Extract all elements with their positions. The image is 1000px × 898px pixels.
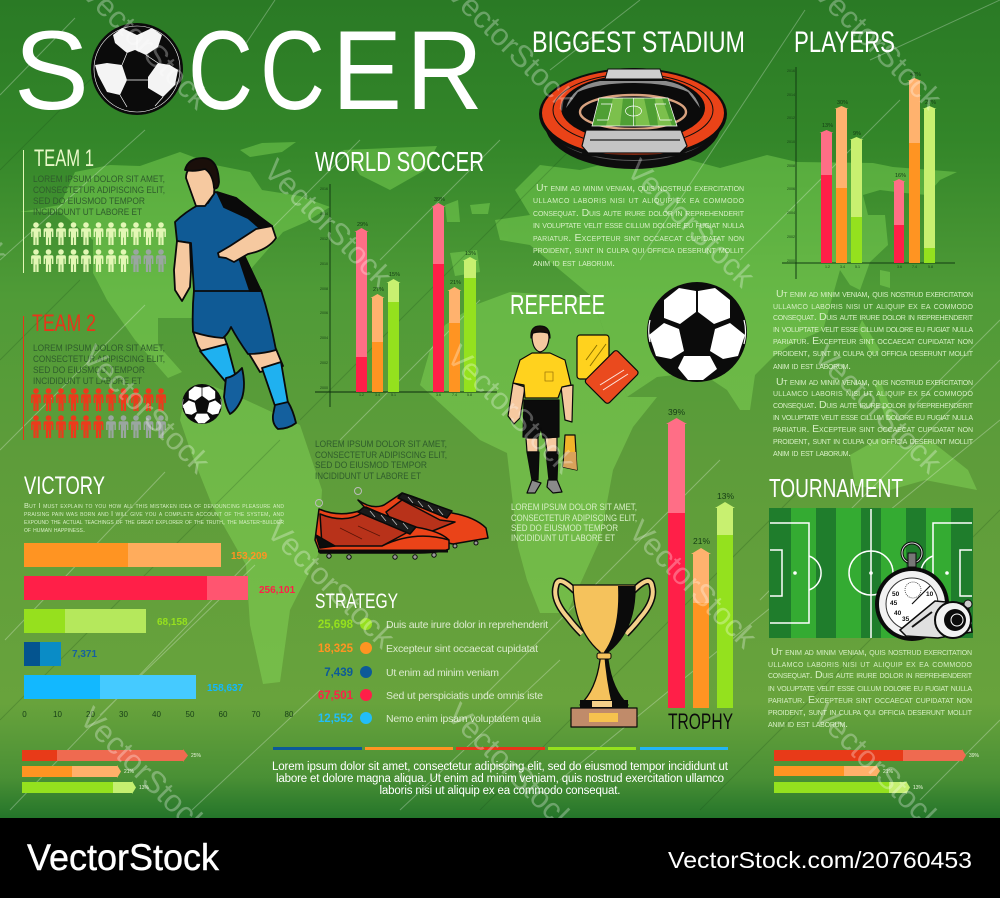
text block: players: proident, sunt in culpa qui officia deserunt mollit xyxy=(773,435,974,447)
text block: players: consequat. Duis aute irure dolor in reprehenderit xyxy=(773,399,974,411)
list: strategy items: Duis aute irure dolor in reprehenderit xyxy=(386,619,548,631)
text block: team 1 xyxy=(33,174,165,218)
text block: stadium: ullamco laboris nisi ut aliquip ex ea commodo xyxy=(533,194,745,206)
text block: players: Ut enim ad minim veniam, quis nostrud exercitation xyxy=(776,288,973,300)
list: strategy items: Nemo enim ipsam voluptatem quia xyxy=(386,713,541,725)
icon: stopwatch xyxy=(875,543,949,641)
text block: players: anim id est laborum. xyxy=(773,360,851,372)
footer logo text: VectorStock xyxy=(27,837,219,878)
chart: world soccer bars: 2002 xyxy=(320,361,328,365)
chart: world soccer bars: 1.2 xyxy=(359,393,364,397)
heading: victory: VICTORY xyxy=(24,472,105,500)
world map xyxy=(20,142,977,684)
title: SOCCER: R xyxy=(406,8,483,133)
text block: referee caption: LOREM IPSUM DOLOR SIT AMET, xyxy=(511,502,637,513)
icon: small soccer ball xyxy=(182,384,222,424)
chart: players bars: 2004 xyxy=(787,211,795,215)
icon: trophy cup xyxy=(555,581,653,727)
icons: team 2 people xyxy=(31,388,166,438)
text block: tournament: proident, sunt in culpa qui officia deserunt mollit xyxy=(768,706,973,718)
chart: world soccer bars: 2012 xyxy=(320,237,328,241)
text block: referee caption: INCIDIDUNT UT LABORE ET xyxy=(511,533,615,544)
chart: players bars xyxy=(782,67,955,279)
list: strategy items: Excepteur sint occaecat cupidatat xyxy=(386,643,538,655)
heading: strategy: STRATEGY xyxy=(315,590,398,613)
chart: victory horizontal bars: 7,371 xyxy=(72,649,97,660)
text block: stadium: consequat. Duis aute irure dolor in reprehenderit xyxy=(533,207,745,219)
text block: tournament: anim id est laborum. xyxy=(768,718,848,730)
text block: stadium: pariatur. Excepteur sint occaecat cupidatat non xyxy=(533,232,744,244)
chart: world soccer bars: 3.4 xyxy=(375,393,380,397)
heading: players: PLAYERS xyxy=(794,26,895,59)
dividers: footer colour strip xyxy=(273,747,728,750)
text block: players: ullamco laboris nisi ut aliquip ex ea commodo xyxy=(773,387,974,399)
text block: victory: expound the actual teachings of the great explorer of the truth, the master-builder xyxy=(24,517,284,526)
text block: victory: of human happiness. xyxy=(24,525,85,534)
chart: world soccer bars: 5.8 xyxy=(467,393,472,397)
panel: strategy xyxy=(315,590,548,725)
icons: team 1 people xyxy=(31,222,166,272)
list: strategy items: Ut enim ad minim veniam xyxy=(386,667,499,679)
list: strategy items: Sed ut perspiciatis unde omnis iste xyxy=(386,690,543,702)
text block: footer paragraph: labore et dolore magna aliqua. Ut enim ad minim veniam, quis nostrud exercitation ullamco xyxy=(276,773,724,785)
chart: players bars: 2012 xyxy=(787,116,795,120)
heading: biggest stadium: BIGGEST STADIUM xyxy=(532,26,745,59)
list: strategy items: 7,439 xyxy=(324,667,353,679)
watermarks: VectorStock xyxy=(257,152,399,294)
icon: large soccer ball xyxy=(647,282,747,382)
title: SOCCER: E xyxy=(332,8,402,133)
heading: trophy: TROPHY xyxy=(668,709,733,734)
title: SOCCER: S xyxy=(14,8,89,133)
watermarks: VectorStock xyxy=(73,700,215,842)
chart: victory horizontal bars: 40 xyxy=(152,710,161,719)
icon: whistle xyxy=(900,600,972,638)
chart: world soccer bars: 21% xyxy=(450,280,461,286)
icon: stopwatch: 10 xyxy=(926,591,934,598)
chart: world soccer bars: 2008 xyxy=(320,287,328,291)
chart: victory horizontal bars: 0 xyxy=(22,710,27,719)
heading: team 2: TEAM 2 xyxy=(32,310,96,337)
chart: victory horizontal bars: 50 xyxy=(186,710,195,719)
chart: world soccer bars: 2006 xyxy=(320,311,328,315)
text block: referee caption: SED DO EIUSMOD TEMPOR xyxy=(511,523,618,534)
text block: players: consequat. Duis aute irure dolor in reprehenderit xyxy=(773,311,974,323)
chart: players bars: 7.4 xyxy=(912,265,917,269)
chart: victory horizontal bars: 60 xyxy=(219,710,228,719)
text block: players: pariatur. Excepteur sint occaecat cupidatat non xyxy=(773,423,973,435)
text block: players: in voluptate velit esse cillum dolore eu fugiat nulla xyxy=(773,411,973,423)
chart: world soccer bars: 7.4 xyxy=(452,393,457,397)
chart: world soccer bars: 39% xyxy=(434,197,445,203)
footer url text: VectorStock.com/20760453 xyxy=(668,847,972,873)
text block: stadium: anim id est laborum. xyxy=(533,257,615,269)
chart: players bars: 1.2 xyxy=(825,265,830,269)
chart: world soccer bars: 5.1 xyxy=(391,393,396,397)
chart: players bars: 5.8 xyxy=(928,265,933,269)
chart: bottom right arrow bars: 13% xyxy=(913,785,924,791)
text block: players: anim id est laborum. xyxy=(773,447,851,459)
panel: team 2 xyxy=(24,310,166,440)
chart: players bars: 2010 xyxy=(787,140,795,144)
text block: team 2: CONSECTETUR ADIPISCING ELIT, xyxy=(33,354,165,365)
chart: world soccer bars: 2000 xyxy=(320,386,328,390)
chart: players bars: 2008 xyxy=(787,164,795,168)
icon: yellow and red cards xyxy=(577,335,639,405)
title: SOCCER: C xyxy=(188,8,253,133)
text block: team 1: SED DO EIUSMOD TEMPOR xyxy=(33,196,145,207)
watermarks: VectorStock xyxy=(807,338,949,480)
chart: players bars: 27% xyxy=(925,100,936,106)
icon: title soccer ball xyxy=(91,23,183,115)
heading: team 1: TEAM 1 xyxy=(34,145,94,172)
list: strategy items xyxy=(318,618,548,725)
text block: referee caption: CONSECTETUR ADIPISCING ELIT, xyxy=(511,513,637,524)
chart: bottom left arrow bars: 13% xyxy=(139,785,150,791)
chart: victory horizontal bars xyxy=(22,543,296,719)
chart: world soccer bars: 15% xyxy=(389,272,400,278)
text block: boots caption: INCIDIDUNT UT LABORE ET xyxy=(315,471,421,482)
text block: team 2: SED DO EIUSMOD TEMPOR xyxy=(33,365,145,376)
chart: victory horizontal bars: 68,158 xyxy=(157,617,188,628)
icon: stopwatch: 45 xyxy=(890,600,898,607)
text block: team 1: LOREM IPSUM DOLOR SIT AMET, xyxy=(33,174,165,185)
icon: referee figure xyxy=(508,326,577,493)
text block: tournament: pariatur. Excepteur sint occaecat cupidatat non xyxy=(768,694,972,706)
chart: trophy bars: 13% xyxy=(717,491,734,501)
title: SOCCER: C xyxy=(260,8,325,133)
text block: tournament: consequat. Duis aute irure dolor in reprehenderit xyxy=(768,669,973,681)
chart: players bars: 2014 xyxy=(787,93,795,97)
text block: team 2: LOREM IPSUM DOLOR SIT AMET, xyxy=(33,343,165,354)
chart: players bars: 2000 xyxy=(787,259,795,263)
chart: world soccer bars: 2016 xyxy=(320,187,328,191)
chart: players bars: 13% xyxy=(822,123,833,129)
text block: footer paragraph: laboris nisi ut aliquip ex ea commodo consequat. xyxy=(380,785,620,797)
watermarks: VectorStock xyxy=(620,152,762,294)
text block: stadium xyxy=(533,182,745,269)
panel: team 1 xyxy=(24,145,166,273)
illustration: soccer player xyxy=(174,158,296,429)
chart: bottom right arrow bars: 39% xyxy=(969,753,980,759)
chart: players bars: 3.4 xyxy=(840,265,845,269)
text block: stadium: Ut enim ad minim veniam, quis nostrud exercitation xyxy=(536,182,744,194)
watermarks: VectorStock xyxy=(440,338,582,480)
watermarks: VectorStock xyxy=(75,338,217,480)
text block: victory: But I must explain to you how all this mistaken idea of denouncing pleasure and xyxy=(24,501,284,510)
chart: players bars: 16% xyxy=(895,173,906,179)
list: strategy items: 18,325 xyxy=(318,643,354,655)
icon: football boots xyxy=(315,488,488,559)
icon: stopwatch: 40 xyxy=(894,610,902,617)
chart: victory horizontal bars: 158,637 xyxy=(207,683,244,694)
text block: footer paragraph: Lorem ipsum dolor sit amet, consectetur adipiscing elit, sed do eiusmod tempor incididunt ut xyxy=(272,761,729,773)
chart: world soccer bars: 13% xyxy=(465,251,476,257)
text block: victory: praising pain was born and I will give you a complete account of the system, and xyxy=(24,509,284,518)
panel: victory xyxy=(22,472,296,719)
text block: stadium: in voluptate velit esse cillum dolore eu fugiat nulla xyxy=(533,219,744,231)
chart: world soccer bars: 2004 xyxy=(320,336,328,340)
icon: stopwatch: 35 xyxy=(902,616,910,623)
chart: trophy bars: 21% xyxy=(693,536,710,546)
text block: players: pariatur. Excepteur sint occaecat cupidatat non xyxy=(773,335,973,347)
text block: players: ullamco laboris nisi ut aliquip ex ea commodo xyxy=(773,300,974,312)
text block: referee caption xyxy=(511,502,637,544)
chart: victory horizontal bars: 30 xyxy=(119,710,128,719)
text block: team 2: INCIDIDUNT UT LABORE ET xyxy=(33,376,142,387)
chart: world soccer bars: 2010 xyxy=(320,262,328,266)
chart: players bars: 5.1 xyxy=(855,265,860,269)
chart: trophy bars xyxy=(666,407,735,708)
chart: players bars: 9% xyxy=(853,131,861,137)
heading: tournament: TOURNAMENT xyxy=(769,473,903,503)
chart: players bars: 2002 xyxy=(787,235,795,239)
list: strategy items: 12,552 xyxy=(318,713,353,725)
text block: players: in voluptate velit esse cillum dolore eu fugiat nulla xyxy=(773,323,973,335)
chart: world soccer bars: 3.6 xyxy=(436,393,441,397)
watermarks: VectorStock xyxy=(807,696,949,838)
chart: victory horizontal bars: 10 xyxy=(53,710,62,719)
chart: world soccer bars: 29% xyxy=(357,222,368,228)
text block: team 2 xyxy=(33,343,165,387)
text block: tournament: Ut enim ad minim veniam, quis nostrud exercitation xyxy=(771,646,972,658)
text block: footer paragraph xyxy=(272,761,729,797)
text block: tournament: ullamco laboris nisi ut aliquip ex ea commodo xyxy=(768,658,973,670)
chart: world soccer bars: 27% xyxy=(373,287,384,293)
chart: players bars: 30% xyxy=(837,100,848,106)
chart: victory horizontal bars: 20 xyxy=(86,710,95,719)
text block: players: Ut enim ad minim veniam, quis nostrud exercitation xyxy=(776,376,973,388)
chart: bottom left arrow bars: 21% xyxy=(124,769,135,775)
chart: world soccer bars: 2014 xyxy=(320,212,328,216)
watermarks: VectorStock xyxy=(440,696,582,838)
list: strategy items: 25,698 xyxy=(318,619,354,631)
text block: victory xyxy=(24,501,284,534)
text block: boots caption: LOREM IPSUM DOLOR SIT AMET, xyxy=(315,439,447,450)
chart: players bars: 42% xyxy=(910,72,921,78)
heading: referee: REFEREE xyxy=(510,289,605,320)
text block: team 1: INCIDIDUNT UT LABORE ET xyxy=(33,207,142,218)
title: SOCCER xyxy=(14,8,483,133)
illustration: tournament pitch xyxy=(769,508,973,638)
text block: boots caption: SED DO EIUSMOD TEMPOR xyxy=(315,460,427,471)
chart: victory horizontal bars: 256,101 xyxy=(259,585,296,596)
chart: bottom right arrow bars: 21% xyxy=(883,769,894,775)
chart: players bars: 3.6 xyxy=(897,265,902,269)
chart: bottom left arrow bars xyxy=(22,749,202,794)
icon: stopwatch: 50 xyxy=(892,591,900,598)
chart: victory horizontal bars: 80 xyxy=(285,710,294,719)
chart: victory horizontal bars: 153,209 xyxy=(231,551,268,562)
icon: stadium xyxy=(539,68,727,169)
text block: stadium: proident, sunt in culpa qui officia deserunt mollit xyxy=(533,244,745,256)
footer bar xyxy=(0,818,1000,898)
text block: tournament xyxy=(768,646,973,730)
text block: players xyxy=(773,288,974,459)
chart: world soccer bars xyxy=(315,184,497,407)
text block: team 1: CONSECTETUR ADIPISCING ELIT, xyxy=(33,185,165,196)
text block: boots caption xyxy=(315,439,447,482)
chart: bottom left arrow bars: 25% xyxy=(191,753,202,759)
chart: victory horizontal bars: 70 xyxy=(252,710,261,719)
chart: bottom right arrow bars xyxy=(774,749,980,794)
chart: players bars: 2006 xyxy=(787,187,795,191)
chart: players bars: 2016 xyxy=(787,69,795,73)
text block: tournament: in voluptate velit esse cillum dolore eu fugiat nulla xyxy=(768,682,972,694)
text block: players: proident, sunt in culpa qui officia deserunt mollit xyxy=(773,347,974,359)
watermarks: VectorStock xyxy=(260,513,402,655)
text block: boots caption: CONSECTETUR ADIPISCING ELIT, xyxy=(315,450,447,461)
list: strategy items: 67,501 xyxy=(318,690,354,702)
chart: trophy bars: 39% xyxy=(668,407,685,417)
heading: world soccer: WORLD SOCCER xyxy=(315,146,484,177)
watermarks: VectorStock xyxy=(622,513,764,655)
